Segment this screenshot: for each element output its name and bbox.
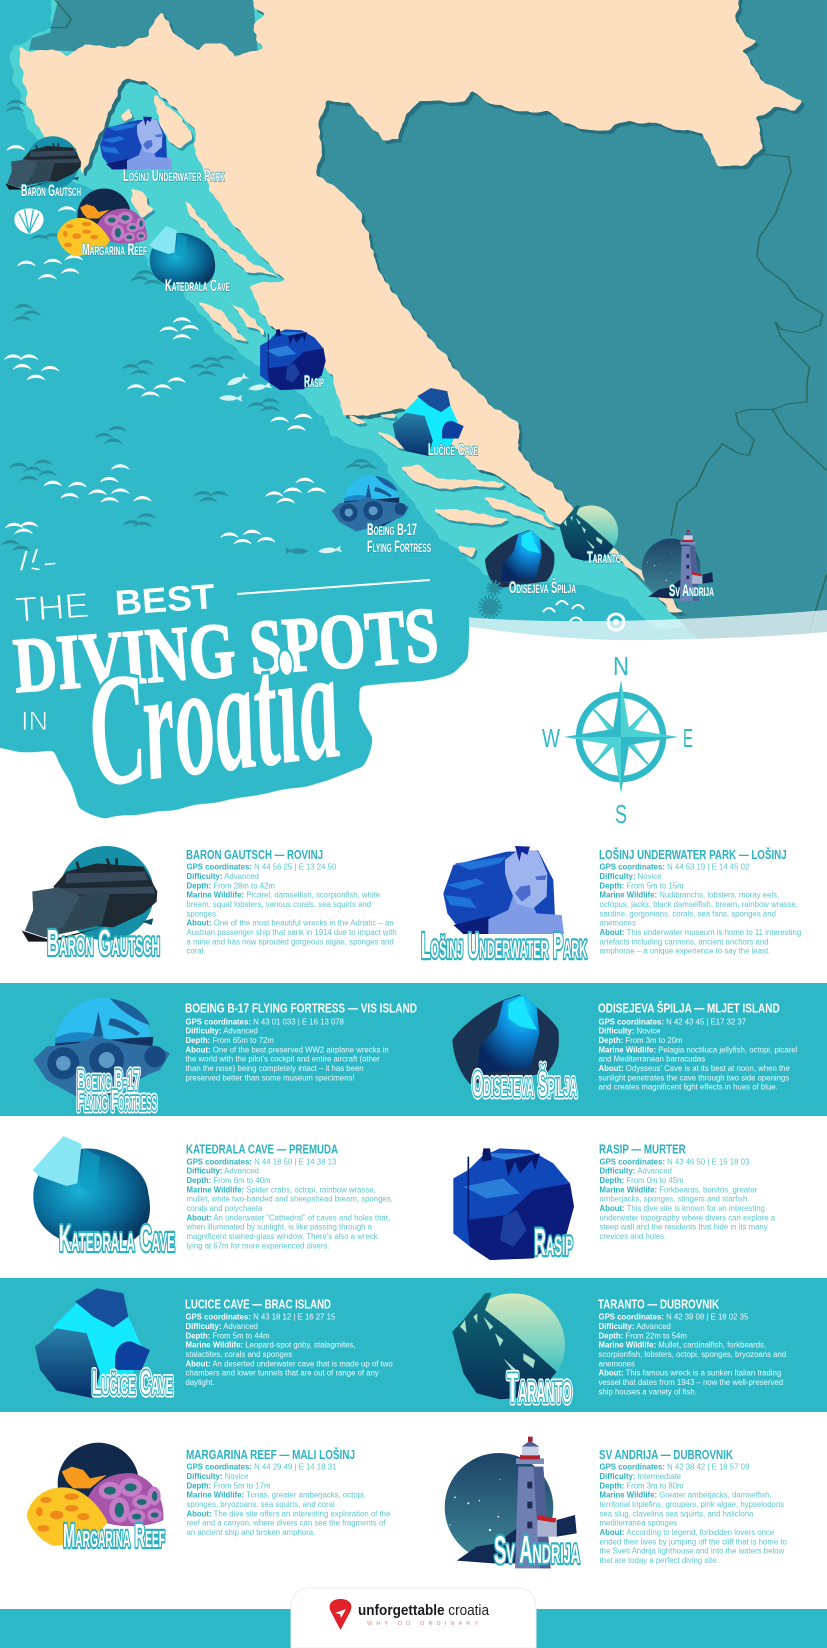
band: footer background	[0, 1609, 827, 1648]
text block: octopus, jacks, black damselfish, bream, rainbow wrasse,	[600, 900, 798, 909]
text block: and creates magnificent light effects in hues of blue.	[598, 1083, 778, 1092]
panel: Odisejeva Spilja: Odisejeva Špilja	[472, 1064, 577, 1104]
icon: compass rose: S	[615, 799, 627, 829]
panel: Rasip: Rasip	[534, 1222, 573, 1264]
title: DIVING SPOTS	[11, 590, 441, 709]
text block: Marine Wildlife: Spider crabs, octopi, rainbow wrasse,	[186, 1185, 376, 1194]
icon: shell	[14, 208, 44, 234]
text block: Depth: From 22m to 54m	[598, 1331, 687, 1340]
title: BEST	[114, 577, 216, 623]
panel: Margarina Reef	[27, 1443, 390, 1554]
text block: Difficulty: Advanced	[186, 872, 259, 881]
title: Croatia	[79, 614, 348, 821]
panel: Baron Gautsch: Baron Gautsch	[47, 922, 160, 963]
map labels: Taranto	[587, 548, 621, 567]
icon: map pin	[330, 1599, 351, 1630]
text block: Depth: From 6m to 40m	[186, 1176, 271, 1185]
text block: Difficulty: Advanced	[186, 1167, 259, 1176]
title: THE	[14, 586, 90, 630]
text block: Depth: From 65m to 72m	[186, 1036, 274, 1045]
icon: compass rose	[542, 651, 693, 829]
panel: Margarina Reef: Margarina Reef	[63, 1517, 165, 1554]
map labels: Odisejeva Špilja	[509, 578, 576, 597]
text block: underwater topography where divers can explore a	[600, 1213, 776, 1222]
text block: crevices and holes.	[600, 1232, 666, 1241]
text block: Difficulty: Advanced	[186, 1322, 258, 1331]
heading: BARON GAUTSCH — ROVINJ	[186, 847, 323, 862]
map labels: Flying Fortress	[367, 537, 431, 556]
text block: amberjacks, sponges, stingers and starfish	[600, 1195, 747, 1204]
text block: GPS coordinates: N 43 18 12 | E 16 27 15	[186, 1313, 335, 1322]
text block: chambers and lower tunnels that are out of range of any	[186, 1369, 379, 1378]
panel: Boeing B-17: Flying Fortress	[77, 1085, 157, 1117]
panel: Rasip	[453, 1142, 776, 1264]
heading: SV ANDRIJA — DUBROVNIK	[599, 1447, 733, 1462]
panel: Taranto: Taranto	[507, 1364, 572, 1411]
panel: Boeing B-17	[33, 998, 417, 1117]
text block: About: According to legend, forbidden lovers once	[600, 1528, 774, 1537]
panel: Katedrala Cave: Katedrala Cave	[59, 1218, 175, 1259]
text block: GPS coordinates: N 43 46 50 | E 15 18 03	[600, 1157, 749, 1166]
label	[507, 1364, 572, 1411]
text block: sponges	[186, 909, 216, 918]
text block: corals and polychaeta	[186, 1204, 263, 1213]
text block: coral.	[186, 947, 206, 956]
text block: Depth: From 5m to 17m	[186, 1481, 271, 1490]
panel: Odisejeva Spilja: Odisejeva Špilja	[472, 1064, 577, 1104]
text block: artefacts including cannons, ancient anchors and	[600, 937, 769, 946]
text block: GPS coordinates: N 42 39 08 | E 18 02 35	[598, 1313, 748, 1322]
panel: Lucice Cave: Lučice Cave	[92, 1364, 173, 1402]
text block: Marine Wildlife: Nudibranchs, lobsters, moray eels,	[600, 891, 779, 900]
text block: Difficulty: Novice	[186, 1472, 248, 1481]
text block: Marine Wildlife: Picarel, damselfish, scorpionfish, white	[186, 891, 380, 900]
map labels: Sv Andrija	[669, 581, 714, 600]
panel: Sv Andrija: Sv Andrija	[494, 1529, 580, 1572]
text block: mediterranea sponges	[600, 1519, 677, 1528]
label: Boeing B-17	[77, 1065, 140, 1097]
text block: ended their lives by jumping off the cliff that is home to	[600, 1537, 788, 1546]
text block: Marine Wildlife: Pelagia noctiluca jellyfish, octopi, picarel	[598, 1045, 797, 1054]
map labels: Lošinj Underwater Park	[123, 166, 225, 185]
heading: TARANTO — DUBROVNIK	[598, 1296, 719, 1311]
text block: About: An deserted underwater cave that is made up of two	[186, 1359, 393, 1368]
text block: Difficulty: Novice	[600, 872, 661, 881]
text block: territorial triplefins, groupers, pink algae, hypselodoris	[600, 1500, 784, 1509]
text block: GPS coordinates: N 44 53 19 | E 14 45 02	[600, 863, 749, 872]
text block: lying at 67m for more experienced divers.	[186, 1241, 330, 1250]
text block: anemones	[598, 1359, 635, 1368]
panel: Losinj Underwater Park: Lošinj Underwater Park	[421, 925, 587, 966]
panel: Boeing B-17: Flying Fortress	[77, 1085, 157, 1117]
map labels: Katedrala Cave	[165, 276, 230, 295]
text block: preserved better than some museum specimens!	[186, 1073, 355, 1082]
heading: LUCICE CAVE — BRAC ISLAND	[185, 1296, 331, 1311]
text block: daylight.	[186, 1378, 215, 1387]
label: Boeing B-17	[77, 1065, 140, 1097]
heading: KATEDRALA CAVE — PREMUDA	[186, 1142, 338, 1157]
panel: Taranto	[452, 1293, 786, 1411]
heading: MARGARINA REEF — MALI LOŠINJ	[186, 1447, 355, 1462]
label	[77, 1065, 157, 1117]
text block: GPS coordinates: N 42 43 45 | E17 32 37	[598, 1017, 746, 1026]
icon: compass rose: N	[613, 651, 629, 681]
icon: sea urchins and spiral shell	[482, 583, 624, 630]
text block: sea slug, clavelina sea squirts, and haliclona	[600, 1509, 754, 1518]
text block: Marine Wildlife: Leopard-spot goby, stalagmites,	[186, 1341, 356, 1350]
text block: an ancient ship and broken amphora.	[186, 1528, 315, 1537]
text block: magnificent stained-glass window. There's also a wreck	[186, 1232, 378, 1241]
icon: compass rose: W	[542, 723, 560, 753]
footer logo card	[291, 1588, 536, 1648]
text block: Depth: From 3m to 20m	[598, 1036, 683, 1045]
text block: GPS coordinates: N 43 01 033 | E 16 13 078	[186, 1017, 344, 1026]
text block: Difficulty: Advanced	[186, 1027, 258, 1036]
panel: Katedrala Cave	[33, 1136, 393, 1259]
band: row 2 background	[0, 983, 827, 1116]
text block: Marine Wildlife: Mullet, cardinalfish, forkbeards,	[598, 1341, 766, 1350]
title	[11, 577, 441, 821]
map labels: Margarina Reef	[82, 240, 147, 259]
text block: the world with the pilot's cockpit and entire aircraft (other	[186, 1055, 380, 1064]
text block: About: Odysseus' Cave is at its best at noon, when the	[598, 1064, 790, 1073]
text block: and Mediterranean barracudas	[598, 1055, 705, 1064]
heading: RASIP — MURTER	[599, 1142, 686, 1157]
map labels: Rasip	[304, 372, 324, 391]
text block: About: One of the most beautiful wrecks in the Adriatic – an	[186, 919, 394, 928]
text block: GPS coordinates: N 44 29 49 | E 14 18 31	[186, 1463, 336, 1472]
panel: Baron Gautsch	[22, 846, 397, 963]
map labels: Lučice Cave	[428, 440, 478, 459]
text block: Difficulty: Novice	[598, 1027, 660, 1036]
panel: Losinj Underwater Park	[421, 846, 801, 966]
text block: Depth: From 3m to 80m	[600, 1481, 684, 1490]
text block: amphorae – a unique experience to say the least.	[600, 947, 770, 956]
text block: Depth: From 5m to 15m	[600, 881, 684, 890]
text block: Depth: From 28m to 42m	[186, 881, 275, 890]
text block: steep wall and the residents that hide in its many	[600, 1223, 768, 1232]
text block: Austrian passenger ship that sank in 1914 due to impact with	[186, 928, 397, 937]
text block: GPS coordinates: N 42 38 42 | E 18 57 09	[600, 1463, 749, 1472]
text block: Marine Wildlife: Greater amberjacks, damselfish,	[600, 1491, 771, 1500]
text block: About: This famous wreck is a sunken Italian trading	[598, 1369, 781, 1378]
band: row 4 background	[0, 1278, 827, 1412]
text block: vessel that dates from 1943 – now the well-preserved	[598, 1378, 783, 1387]
text block: About: An underwater "Cathedral" of caves and holes that,	[186, 1213, 390, 1222]
text block: Difficulty: Advanced	[600, 1167, 672, 1176]
text block: the Sveti Andrija lighthouse and into the waters below	[600, 1547, 785, 1556]
text block: About: This dive site is known for an interesting	[600, 1204, 765, 1213]
label	[472, 1064, 577, 1104]
panel: Lucice Cave: Lučice Cave	[92, 1364, 173, 1402]
panel: Odisejeva Spilja	[452, 994, 798, 1104]
text block: when illuminated by sunlight, is like passing through a	[186, 1223, 373, 1232]
label	[92, 1364, 173, 1402]
text block: GPS coordinates: N 44 56 25 | E 13 24 50	[186, 863, 336, 872]
text block: About: One of the best preserved WW2 airplane wrecks in	[186, 1045, 389, 1054]
text block: Marine Wildlife: Tunas, greater amberjacks, octopi,	[186, 1491, 366, 1500]
heading: BOEING B-17 FLYING FORTRESS — VIS ISLAND	[185, 1001, 417, 1016]
text block: Marine Wildlife: Forkbeards, bonitos, greater	[600, 1185, 757, 1194]
map labels: Boeing B-17	[367, 520, 417, 539]
panel: Sv Andrija	[445, 1437, 788, 1572]
text block: ship houses a variety of fish.	[598, 1387, 697, 1396]
map labels	[21, 166, 714, 600]
text block: sponges, bryozoans, sea squirts, and coral	[186, 1500, 335, 1509]
text block: mullet, white two-banded and sheepshead bream, sponges,	[186, 1195, 393, 1204]
map of Croatia	[0, 0, 827, 681]
text block: About: The dive site offers an interesting exploration of the	[186, 1509, 390, 1518]
text block: Difficulty: Advanced	[598, 1322, 671, 1331]
panel: Taranto: Taranto	[507, 1364, 572, 1411]
icon: compass rose: E	[683, 723, 693, 753]
text block: sardine, gorgonians, corals, sea fans, sponges and	[600, 909, 776, 918]
text block: a mine and has now sprouted gorgeous algae, sponges and	[186, 937, 394, 946]
brand name: unforgettable croatia	[358, 1602, 490, 1619]
text block: that are today a perfect diving site.	[600, 1556, 719, 1565]
title: IN	[21, 706, 48, 736]
text block: bream, squat lobsters, various corals, sea squirts and	[186, 900, 371, 909]
text block: GPS coordinates: N 44 18 50 | E 14 38 13	[186, 1157, 336, 1166]
text block: stalactites, corals and sponges	[186, 1350, 292, 1359]
text block: than the nose) being completely intact – it has been	[186, 1064, 364, 1073]
wave edge of map	[464, 610, 827, 660]
title badge	[0, 590, 469, 818]
text block: sunlight penetrates the cave through two side openings	[598, 1073, 789, 1082]
map illustrations	[5, 117, 713, 601]
text block: reef and a canyon, where divers can see the fragments of	[186, 1519, 386, 1528]
text block: scorpionfish, lobsters, octopi, sponges, bryozoans and	[598, 1350, 786, 1359]
text block: Depth: From 5m to 44m	[186, 1331, 270, 1340]
text block: Depth: From 0m to 45m	[600, 1176, 684, 1185]
tagline: WHY DO ORDINARY	[367, 1621, 478, 1627]
map labels: Baron Gautsch	[21, 181, 81, 200]
panel: Lucice Cave	[35, 1288, 393, 1402]
text block: Difficulty: Intermediate	[600, 1472, 681, 1481]
text block: About: This underwater museum is home to 11 interesting	[600, 928, 801, 937]
text block: anemones	[600, 919, 636, 928]
